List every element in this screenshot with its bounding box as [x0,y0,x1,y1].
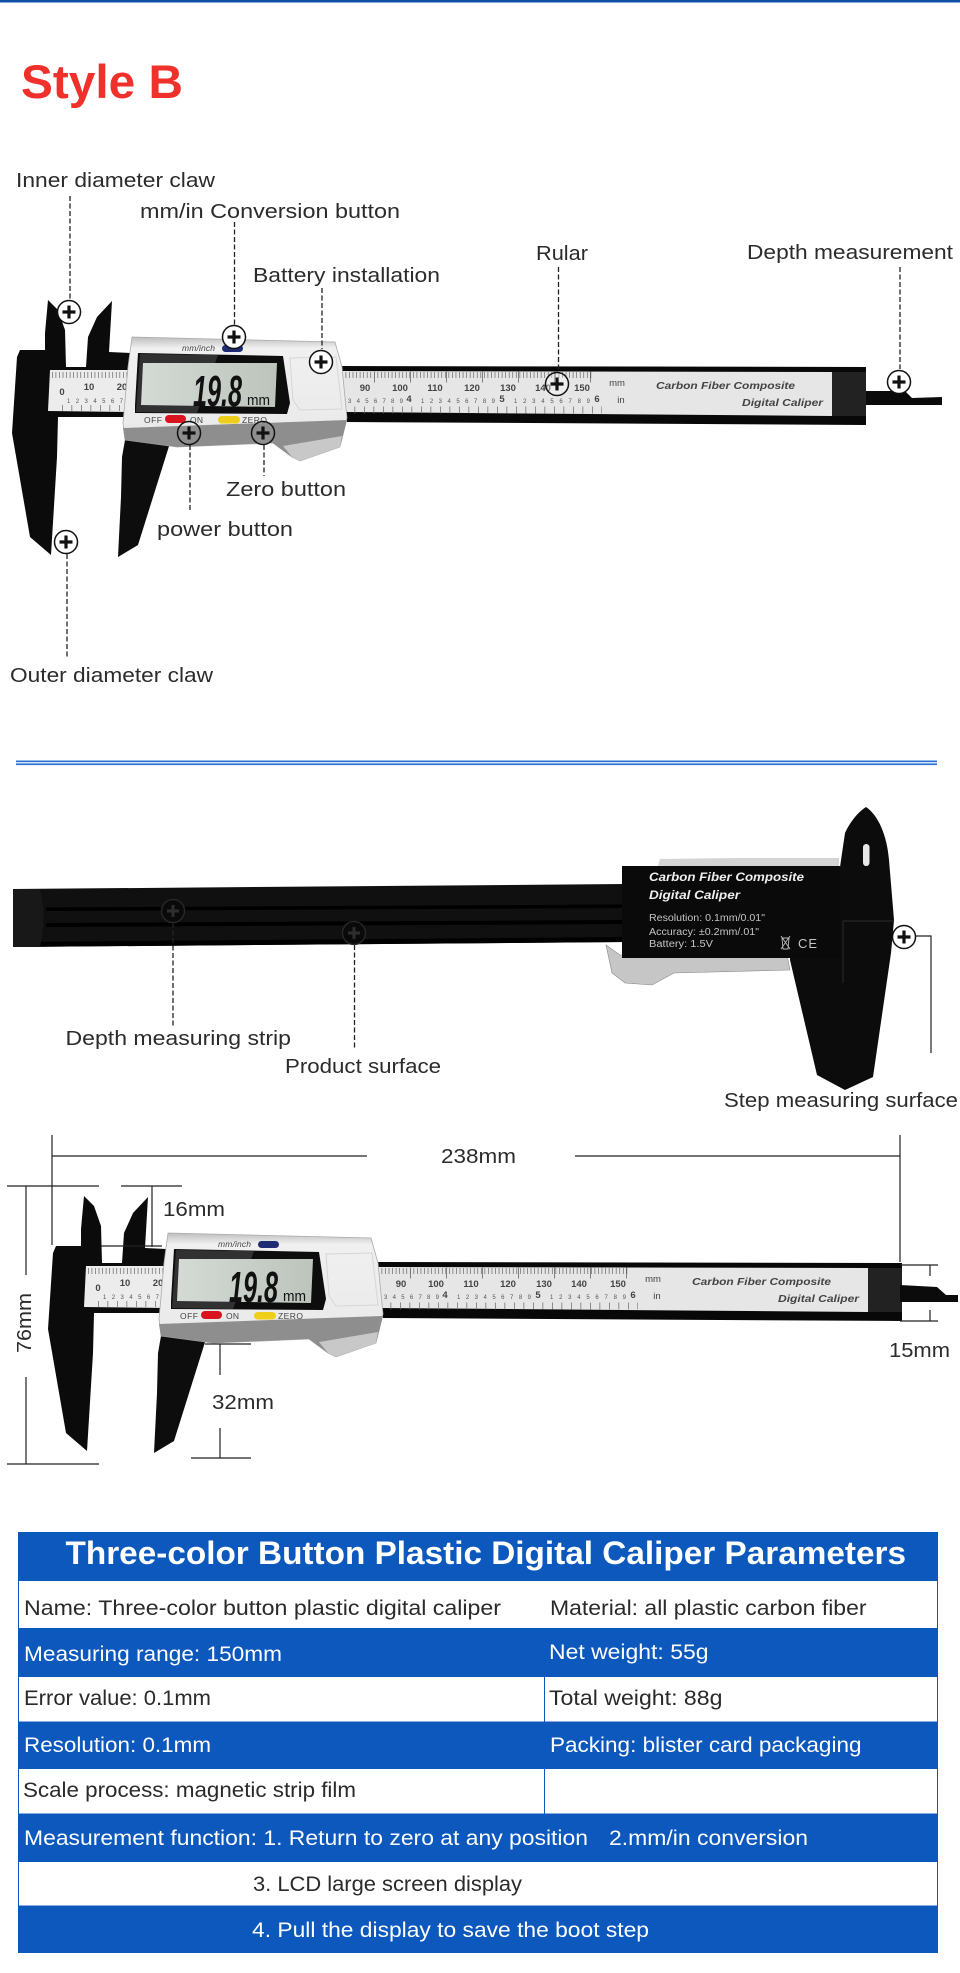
LCD bezel [171,1249,326,1310]
LCD reading: 19.8 [229,1263,278,1312]
table background [18,1532,938,1953]
ruler numbers: 0 [59,387,65,398]
label: Outer diameter claw: Outer diameter claw [10,664,213,687]
step line [843,921,894,983]
dimension: 16mm: 16mm [163,1198,225,1221]
beam end cap [13,889,44,947]
back view markers [162,900,916,948]
battery cover outline [326,1253,378,1306]
mm/in button [258,1241,279,1248]
button labels: ZERO [242,415,267,425]
LCD glare [136,354,218,413]
fixed jaws [48,1196,166,1451]
label: Battery installation: Battery installation [253,264,440,287]
jaw head [790,807,894,1090]
slider body [123,337,347,461]
LCD bezel [135,353,290,414]
beam [342,366,866,425]
ruler numbers: 90 [396,1279,406,1290]
ruler numbers [59,378,625,406]
end block dark [868,1268,902,1312]
row: error value and total weight: Error value: 0.1mm [24,1687,211,1710]
power button [165,415,186,423]
trigger [319,1332,378,1357]
ruler numbers: 130 [536,1279,552,1290]
ruler numbers: 140 [535,383,551,394]
button labels [144,343,267,425]
button labels: ON [226,1311,239,1321]
dimension caliper depth rod [900,1285,958,1302]
title: Style B: Style B [21,55,183,108]
ruler numbers: 130 [500,383,516,394]
ruler numbers: 10 [120,1278,130,1289]
ruler small inch digits: 3 4 5 6 7 8 9 [348,399,404,405]
ruler printed name [656,380,824,409]
back trigger [606,945,790,985]
label: Step measuring surface: Step measuring surface [724,1089,958,1112]
ruler numbers: 120 [464,383,480,394]
LCD unit: mm [247,392,270,409]
silver slider behind [622,858,839,868]
beam [378,1262,902,1321]
row: measuring range and net weight: Net weight: 55g [549,1641,708,1664]
ruler small inch digits [67,399,591,405]
ruler numbers: 0 [95,1283,101,1294]
ruler numbers: 100 [428,1279,444,1290]
ruler printed name [692,1276,860,1305]
LCD reading: 19.8 [193,367,242,416]
parameters table [18,1532,938,1953]
row: name and material [24,1597,866,1620]
button labels: OFF [144,415,162,425]
label: Depth measurement: Depth measurement [747,241,953,264]
row: measurement function: 2.mm/in conversion [609,1827,808,1850]
ruler numbers: 5 [499,394,505,405]
LCD unit: mm [283,1288,306,1305]
ruler small inch digits: 1 2 3 4 5 6 7 8 9 [514,399,591,405]
block specifications [649,913,817,951]
label: Zero button: Zero button [226,478,346,501]
ruler numbers: 140 [571,1279,587,1290]
lower grey band [159,1316,383,1357]
right ruler scale [376,1267,868,1312]
back view leader lines [173,923,931,1053]
button labels: ON [190,415,203,425]
label: Depth measuring strip: Depth measuring strip [66,1027,291,1050]
dimension: 238mm: 238mm [441,1145,516,1168]
trigger [283,436,342,461]
ruler numbers: 6 [630,1290,636,1301]
button labels: mm/inch [182,343,215,353]
right ruler scale [340,371,832,416]
ruler numbers: 4 [406,394,412,405]
row: measuring range and net weight: Measuring range: 150mm [24,1643,282,1666]
row: pull display: 4. Pull the display to save the boot step [252,1919,649,1942]
ruler numbers: 150 [574,383,590,394]
depth rod [866,391,942,405]
ruler numbers: mm [645,1274,661,1285]
label: Rular: Rular [536,242,588,265]
ruler numbers: 120 [500,1279,516,1290]
icon: recycling bin [781,936,790,949]
ruler ticks [88,1271,638,1306]
row: measurement function [24,1827,808,1850]
front view caliper [12,300,866,557]
ruler numbers [95,1274,661,1302]
row: resolution and packing [24,1734,862,1757]
row: measuring range and net weight [24,1641,708,1666]
button labels [180,1239,303,1321]
table header: Three-color Button Plastic Digital Caliper Parameters [66,1535,906,1571]
ruler numbers: in [617,395,625,406]
ruler small inch digits: 3 4 5 6 7 8 9 [384,1295,440,1301]
ruler numbers: 100 [392,383,408,394]
label: power button: power button [157,518,293,541]
label: Product surface: Product surface [285,1055,441,1078]
top blue bar [0,0,960,2]
block title [649,870,804,902]
jaw slot [863,844,870,866]
end block dark [832,372,866,416]
block specifications: Accuracy: ±0.2mm/.01" [649,927,759,938]
row: resolution and packing: Resolution: 0.1mm [24,1734,211,1757]
row: scale process: Scale process: magnetic strip film [23,1779,356,1802]
label: Inner diameter claw: Inner diameter claw [16,169,215,192]
ruler ticks [52,375,602,410]
ruler small inch digits: 1 2 3 4 5 6 7 8 9 [421,399,496,405]
row: name and material: Name: Three-color button plastic digital caliper [24,1597,501,1620]
ruler numbers: 6 [594,394,600,405]
ruler numbers: 110 [463,1279,479,1290]
LCD screen [141,363,277,407]
block title: Digital Caliper [649,888,741,902]
ruler small inch digits: 1 2 3 4 5 6 7 8 9 [457,1295,532,1301]
ruler numbers: 10 [84,382,94,393]
ruler numbers: 5 [535,1290,541,1301]
ruler small inch digits: 1 2 3 4 5 6 7 8 9 [550,1295,627,1301]
row: name and material: Material: all plastic carbon fiber [550,1597,866,1620]
row: error value and total weight [24,1687,722,1710]
block specifications: Resolution: 0.1mm/0.01" [649,913,765,924]
ruler printed name: Digital Caliper [742,397,824,409]
ruler numbers: in [653,1291,661,1302]
back view caliper [13,807,894,1090]
battery cover outline [290,357,342,410]
zero button [218,416,240,424]
ruler numbers: 90 [360,383,370,394]
button labels: mm/inch [218,1239,251,1249]
left ruler scale [48,370,130,412]
dimension: 76mm: 76mm [13,1293,36,1353]
mm/in button [222,345,243,352]
ruler printed name: Carbon Fiber Composite [656,380,795,392]
ruler numbers: 110 [427,383,443,394]
block specifications: Battery: 1.5V [649,939,713,950]
ruler numbers: 20 [117,382,127,393]
ruler small inch digits [103,1295,627,1301]
white rows [19,1581,937,1906]
button labels: ZERO [278,1311,303,1321]
row: measurement function: Measurement function: 1. Return to zero at any position [24,1827,588,1850]
button labels: OFF [180,1311,198,1321]
dimension: 15mm: 15mm [889,1339,950,1362]
zero button [254,1312,276,1320]
ruler printed name: Digital Caliper [778,1293,860,1305]
ruler small inch digits: 1 2 3 4 5 6 7 [67,399,124,405]
beam grooves [13,904,625,947]
block title: Carbon Fiber Composite [649,870,804,884]
dimension: 32mm: 32mm [212,1391,274,1414]
fixed jaws [12,300,130,555]
ruler small inch digits: 1 2 3 4 5 6 7 [103,1295,160,1301]
callout leader lines [67,196,900,658]
LCD screen [177,1259,313,1303]
callout markers [54,300,910,554]
slider body [159,1233,383,1357]
back beam [13,884,625,947]
ruler numbers: 20 [153,1278,163,1289]
ruler numbers: mm [609,378,625,389]
column dividers [544,1677,545,1814]
power button [201,1311,222,1319]
row: resolution and packing: Packing: blister card packaging [550,1734,862,1757]
dimension lines [7,1135,938,1464]
ruler printed name: Carbon Fiber Composite [692,1276,831,1288]
left ruler scale [84,1266,166,1308]
lower moving jaw [154,1336,206,1453]
lower moving jaw [118,440,170,557]
row: LCD display: 3. LCD large screen display [253,1873,523,1896]
lower grey band [123,420,347,461]
LCD glare [172,1250,254,1309]
dimension view caliper [48,1196,902,1453]
label block [622,866,840,958]
block specifications: CE [798,936,817,951]
section divider [16,760,937,765]
ruler numbers: 4 [442,1290,448,1301]
ruler numbers: 150 [610,1279,626,1290]
label: mm/in Conversion button: mm/in Conversion button [140,200,400,223]
row: error value and total weight: Total weight: 88g [549,1687,722,1710]
